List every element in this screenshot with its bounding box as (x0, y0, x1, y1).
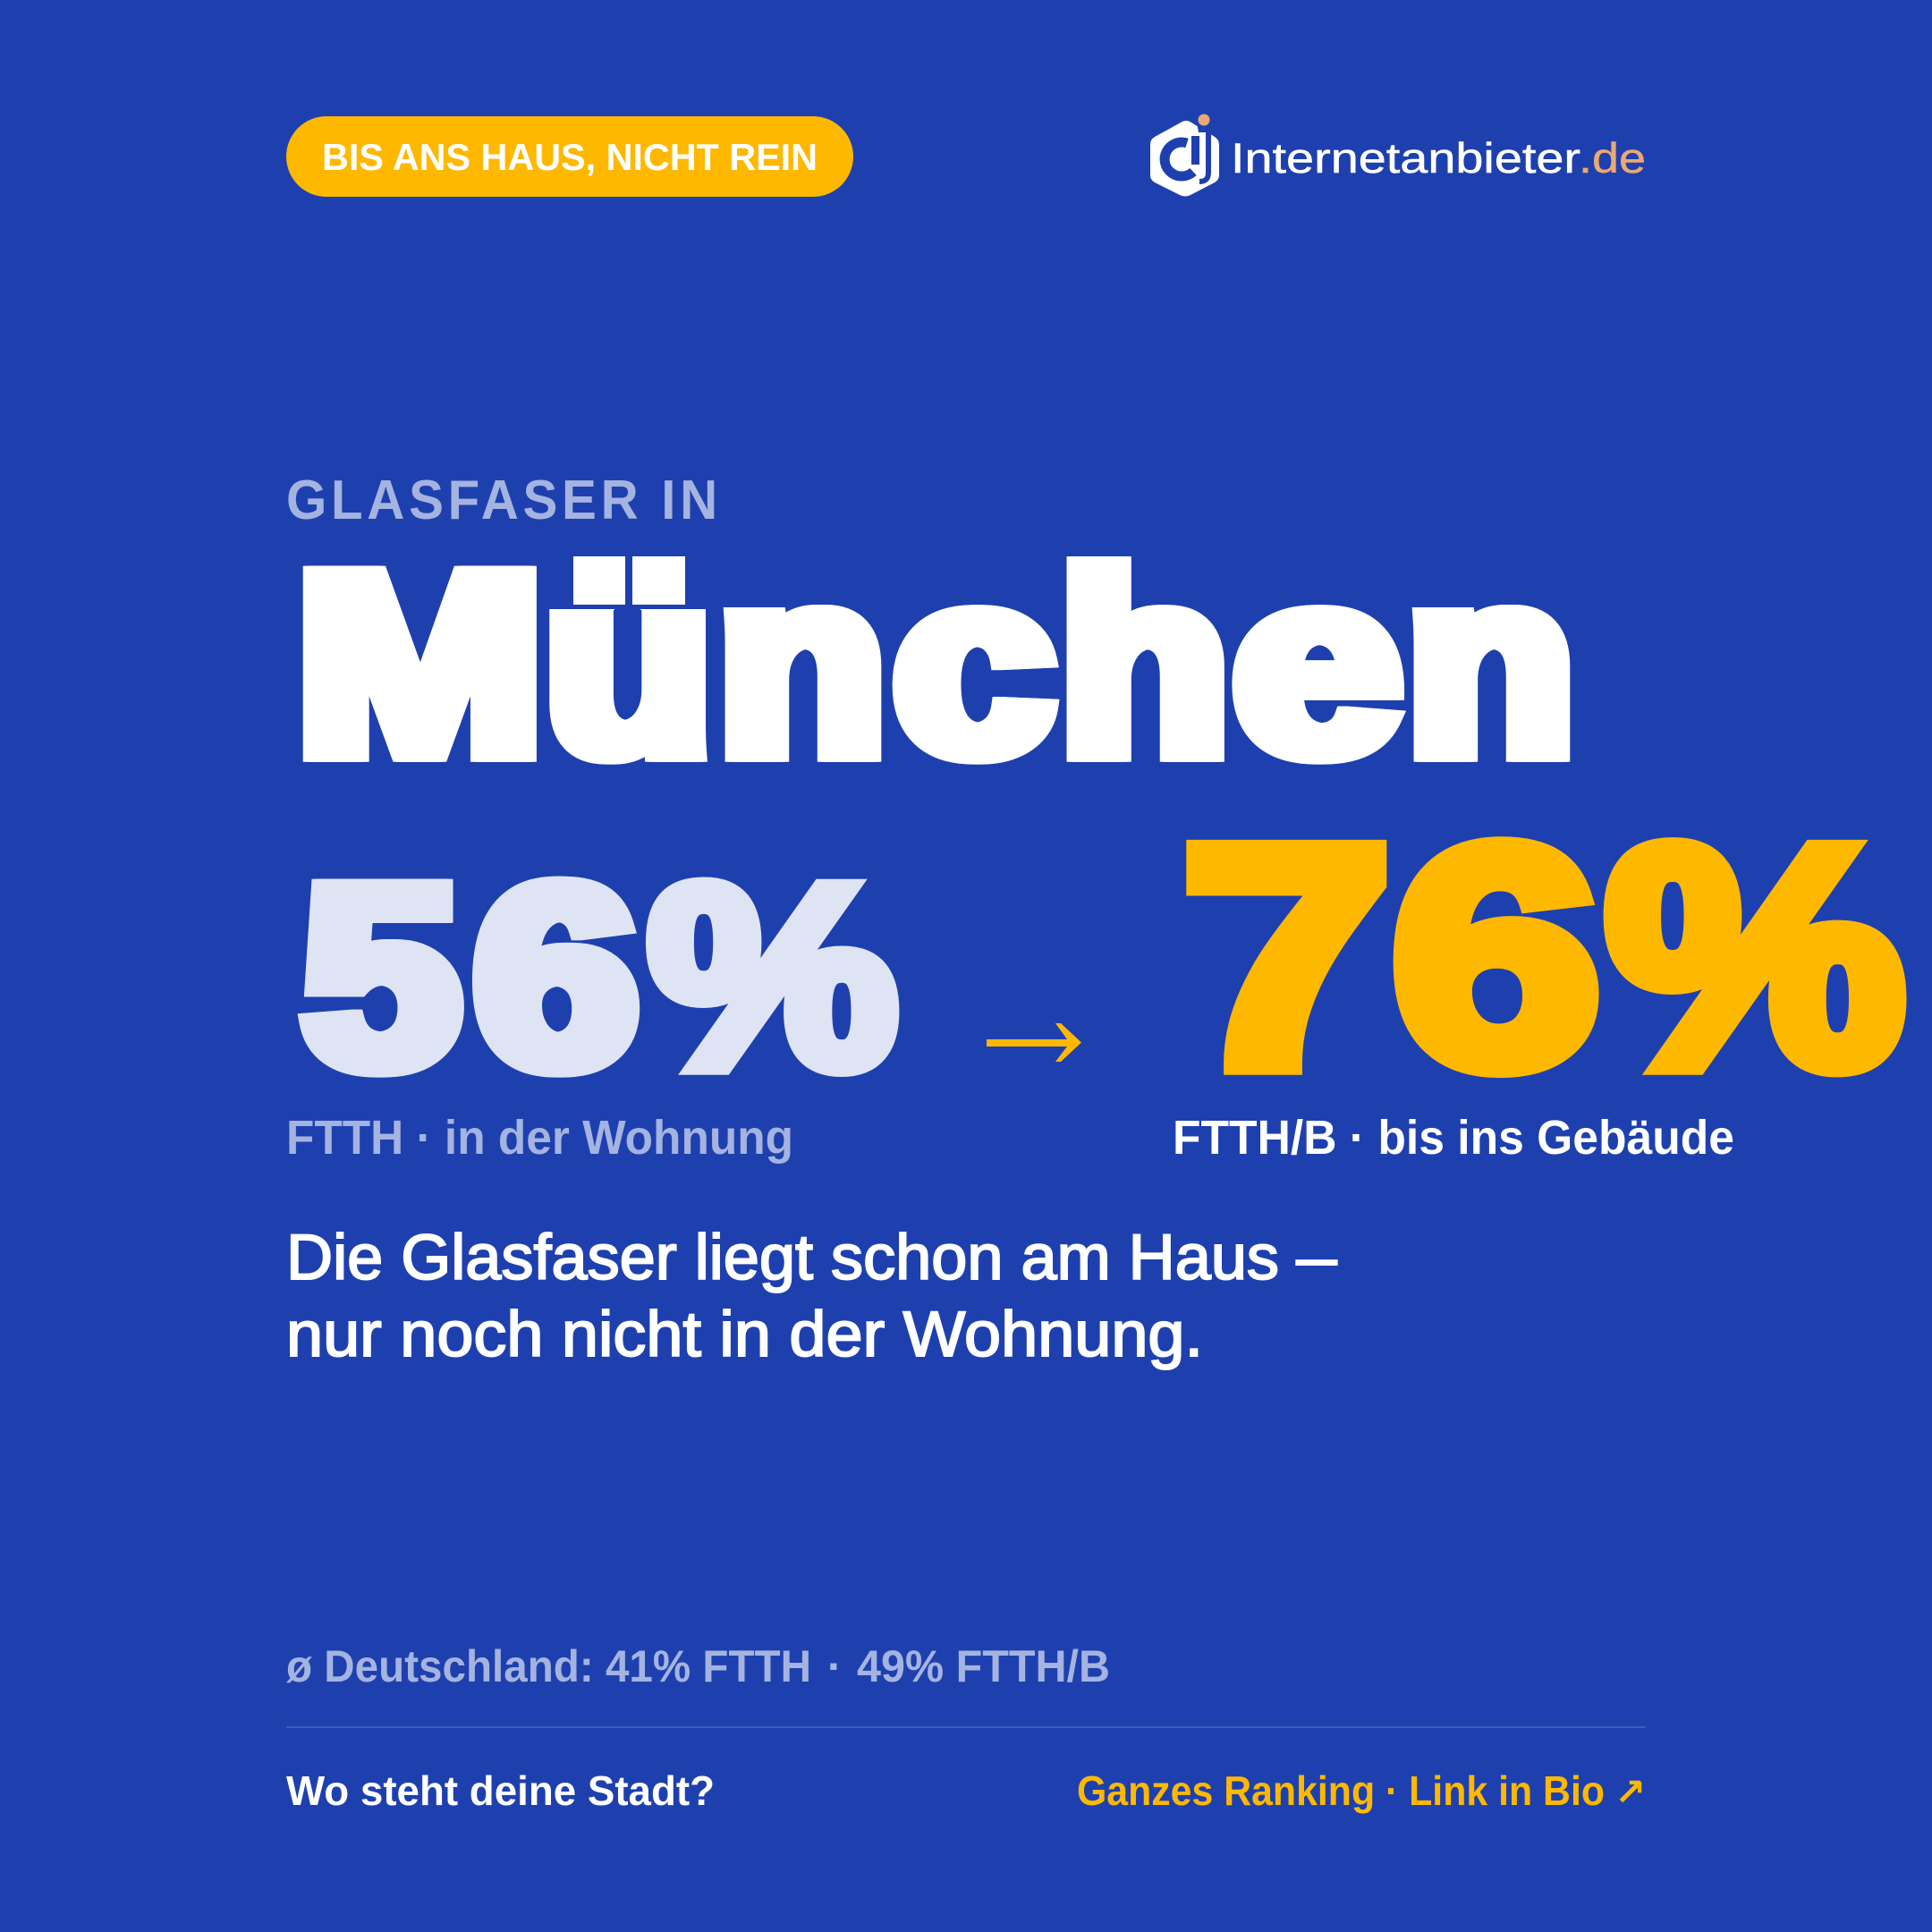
tag pill: BIS ANS HAUS, NICHT REIN (322, 136, 818, 178)
city title: München (302, 556, 1571, 765)
city title: München: n (720, 518, 885, 809)
icon: hexagon logo mark (1150, 114, 1222, 197)
benchmark Deutschland: 49% FTTH/B (857, 1641, 1110, 1691)
city title: München: M (298, 519, 542, 809)
label FTTH/B: FTTH/B · bis ins Gebäude (1173, 1111, 1734, 1165)
label FTTH: FTTH · in der Wohnung (286, 1111, 793, 1165)
value 56 percent (304, 832, 897, 1122)
deck text: Die Glasfaser liegt schon am Haus (286, 1223, 1297, 1293)
logo: Internetanbieter.de (1150, 114, 1646, 197)
deck text: — (1296, 1223, 1337, 1293)
value 56 percent: % (648, 832, 897, 1121)
deck text: nur noch nicht in der Wohnung. (286, 1300, 1203, 1370)
benchmark Deutschland: · (815, 1641, 854, 1691)
tag pill (286, 116, 853, 197)
wordmark: .de (1579, 134, 1646, 182)
value 56 percent: 5 (304, 832, 458, 1122)
benchmark Deutschland (286, 1641, 1110, 1691)
benchmark Deutschland: ø Deutschland: 41% FTTH (286, 1641, 811, 1691)
city title: München: n (1409, 518, 1573, 809)
deck text (286, 1223, 1337, 1370)
city title: München: e (1235, 520, 1400, 809)
stat: 76% FTTH/B (1173, 783, 1904, 1165)
value 76 percent: % (1606, 783, 1904, 1131)
wordmark: Internetanbieter (1231, 134, 1580, 182)
value 76 percent (1182, 783, 1904, 1131)
eyebrow: Glasfaser in: GLASFASER IN (286, 469, 717, 530)
city title: München: c (895, 519, 1053, 809)
icon: arrow up right: ↗ (1614, 1770, 1646, 1814)
stat: 56% FTTH (286, 832, 897, 1165)
value 76 percent: 76 (1182, 784, 1600, 1131)
city title: München: ü (547, 518, 711, 809)
city title: München: h (1062, 520, 1227, 809)
footer call to action: Ganzes Ranking · Link in Bio (1077, 1767, 1605, 1814)
footer question: Wo steht deine Stadt? (286, 1767, 715, 1814)
value 56 percent: 6 (476, 832, 636, 1122)
arrow from 56 to 76 (987, 1023, 1081, 1062)
